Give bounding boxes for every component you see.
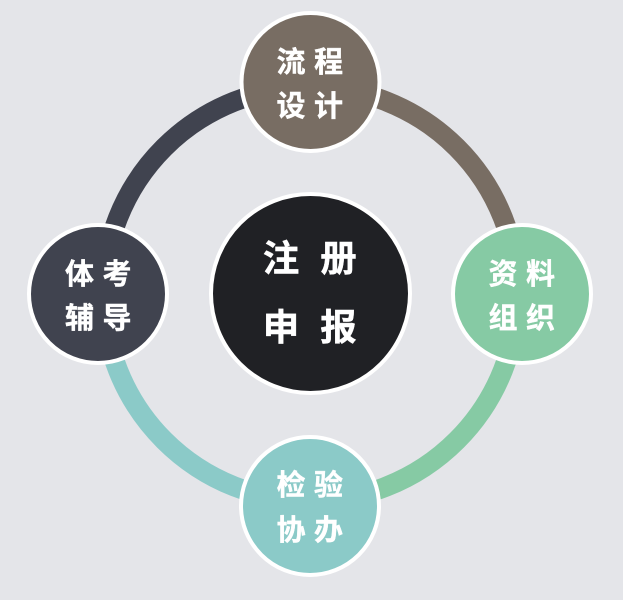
arc: top to right xyxy=(310,87,518,294)
node: 检验协办: 检 xyxy=(276,469,306,502)
node: 流程设计: 程 xyxy=(314,47,343,79)
arc: bottom to left xyxy=(104,294,310,501)
node: 检验协办: 办 xyxy=(314,514,343,547)
node: 体考辅导: 考 xyxy=(102,258,132,291)
node: 资料组织: 资 xyxy=(488,258,518,291)
node: 体考辅导: 体 xyxy=(65,258,94,291)
node: 资料组织 xyxy=(453,225,591,363)
node: 资料组织: 织 xyxy=(526,302,555,335)
node: 检验协办 xyxy=(241,437,379,575)
arc: left to top xyxy=(104,87,310,294)
node: 检验协办: 协 xyxy=(276,514,306,547)
node: 体考辅导 xyxy=(29,225,167,363)
node: 资料组织: 料 xyxy=(526,258,555,291)
center circle: 注册申报: 报 xyxy=(320,307,357,348)
center circle: 注册申报: 册 xyxy=(320,238,357,279)
node: 检验协办: 验 xyxy=(314,469,343,502)
node: 流程设计: 流 xyxy=(276,46,306,79)
node: 体考辅导: 辅 xyxy=(65,302,94,335)
arc: right to bottom xyxy=(310,294,518,501)
node: 体考辅导: 导 xyxy=(102,303,132,335)
node: 流程设计 xyxy=(242,13,380,151)
center circle: 注册申报: 申 xyxy=(263,307,299,348)
node: 流程设计: 设 xyxy=(276,91,306,123)
center circle: 注册申报 xyxy=(211,194,410,393)
node: 流程设计: 计 xyxy=(314,90,343,123)
node: 资料组织: 组 xyxy=(488,302,518,335)
ring: connecting arcs xyxy=(104,87,518,501)
center circle: 注册申报: 注 xyxy=(263,238,299,279)
